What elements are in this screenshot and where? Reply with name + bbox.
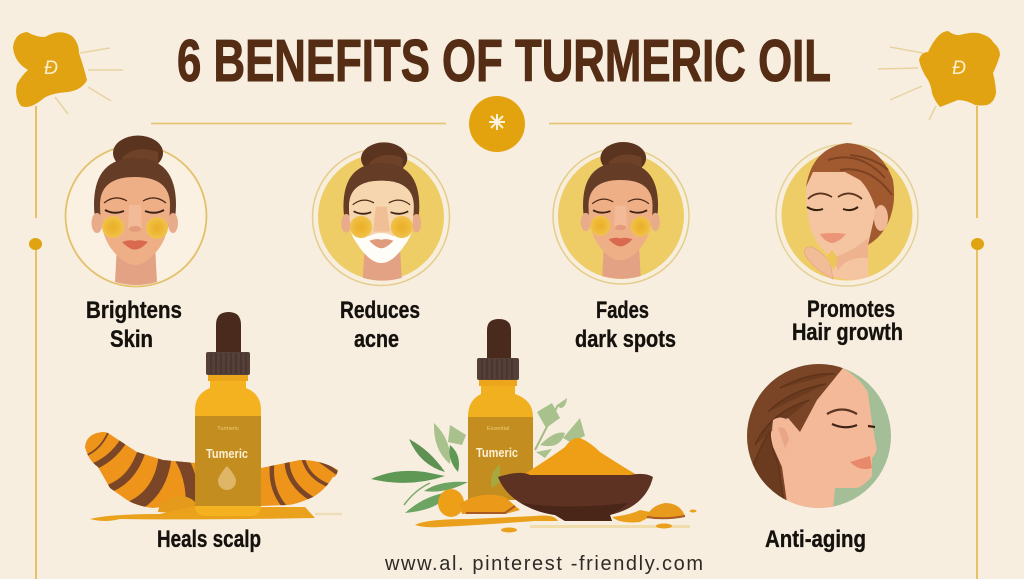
label: reduces acne: Reduces — [340, 297, 420, 324]
header divider with centre badge — [151, 96, 852, 152]
label: fades dark spots — [575, 297, 676, 353]
portrait: reduces acne — [312, 142, 450, 286]
icon: right corner blob — [878, 31, 1000, 120]
illustration: right turmeric bottle: Tumeric — [476, 445, 518, 460]
icon: left corner blob: Ð — [44, 58, 58, 79]
icon: right corner blob: Ð — [952, 58, 966, 79]
illustration: bowl of turmeric powder — [498, 438, 653, 521]
illustration: left rhizome — [85, 432, 342, 521]
website url: www.al. pinterest -friendly.com — [384, 553, 703, 575]
illustration: left turmeric bottle: Tumeric — [206, 446, 248, 461]
label: fades dark spots: Fades — [596, 297, 649, 324]
left timeline — [29, 106, 42, 579]
label: reduces acne — [340, 297, 420, 353]
label: promotes hair growth — [792, 296, 903, 346]
label: brightens skin: Skin — [110, 326, 153, 353]
portrait: anti-aging profile — [740, 360, 891, 510]
right timeline — [971, 106, 984, 579]
portrait: fades dark spots — [553, 142, 689, 284]
illustration: herbs behind right bottle — [371, 398, 585, 513]
illustration: right turmeric bottle: Essential — [487, 426, 509, 432]
illustration: left turmeric bottle: Turmeric — [217, 426, 239, 432]
label: promotes hair growth: Hair growth — [792, 319, 903, 346]
label: heals scalp: Heals scalp — [157, 526, 261, 553]
label: brightens skin: Brightens — [86, 297, 182, 324]
portrait: brightens skin — [66, 136, 206, 286]
icon: left corner blob — [13, 32, 123, 114]
label: promotes hair growth: Promotes — [807, 296, 895, 323]
label: reduces acne: acne — [354, 326, 399, 353]
illustration: turmeric roots and spills — [415, 489, 696, 532]
label: fades dark spots: dark spots — [575, 326, 676, 353]
label: brightens skin — [86, 297, 182, 353]
illustration: left turmeric bottle — [195, 312, 261, 516]
portrait: promotes hair growth — [776, 143, 918, 286]
label: anti-aging: Anti-aging — [765, 526, 866, 553]
illustration: right turmeric bottle — [468, 319, 533, 500]
